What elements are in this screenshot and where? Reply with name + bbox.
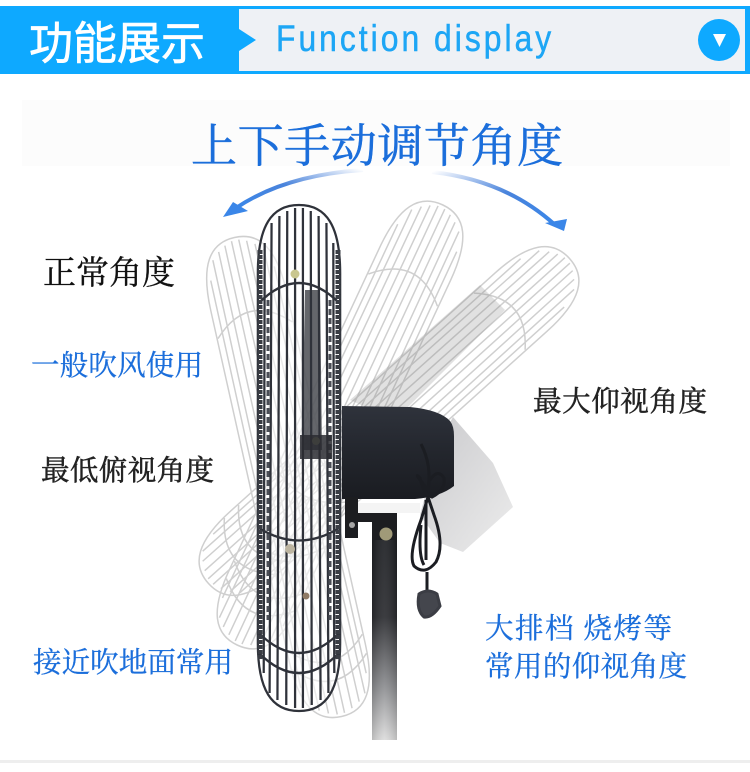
label: general use: 一般吹风使用 — [31, 350, 203, 382]
heading: Chinese section title: 功能展示 — [29, 18, 205, 69]
ghost: maximum raised tilt — [182, 229, 596, 613]
arrow: tilt down — [223, 170, 363, 217]
label: food stalls and BBQ: 大排档 烧烤等 — [485, 613, 672, 645]
arrow: tilt up — [432, 172, 567, 231]
ghost shading of raised fan — [350, 285, 505, 420]
motor housing — [342, 406, 454, 499]
label: near ground use: 接近吹地面常用 — [33, 647, 233, 679]
header title panel — [239, 9, 745, 71]
heading: English section title: Function display — [276, 19, 552, 60]
header banner — [0, 6, 750, 74]
fan cage: front view — [258, 205, 340, 712]
faded title strip — [22, 100, 730, 166]
icon: round dropdown arrow — [698, 19, 740, 61]
ghost motor — [420, 417, 513, 552]
header pointer — [239, 29, 256, 51]
label: common raised angle: 常用的仰视角度 — [485, 651, 687, 683]
ghost: middle raised tilt — [202, 188, 478, 662]
power cord and plug — [412, 444, 444, 617]
bottom divider — [0, 760, 750, 763]
label: maximum raised angle: 最大仰视角度 — [533, 386, 707, 418]
cage bolts — [290, 270, 300, 278]
ghost: lowest tilt — [196, 229, 380, 725]
bracket and bolt — [345, 497, 420, 540]
label: normal angle: 正常角度 — [43, 255, 175, 292]
label: lowest angle: 最低俯视角度 — [41, 455, 214, 487]
stand pole — [372, 535, 397, 740]
title: manual angle adjustment: 上下手动调节角度 — [191, 121, 563, 172]
ghost fans showing tilt range — [182, 188, 596, 725]
